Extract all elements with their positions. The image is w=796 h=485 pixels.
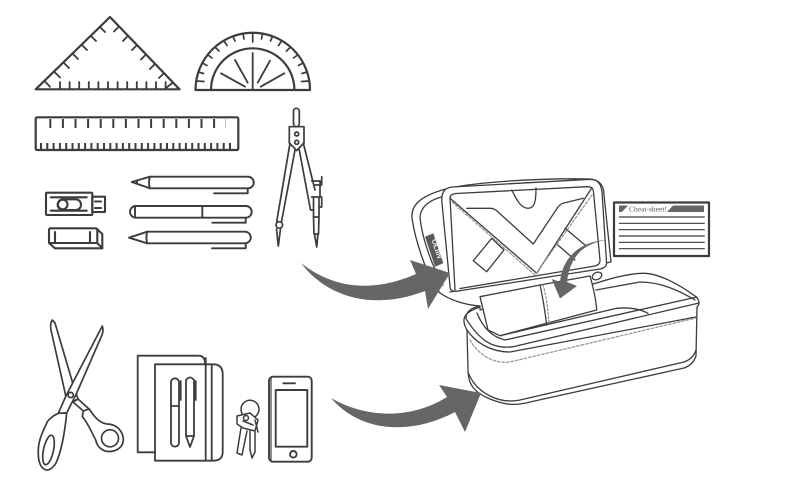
icon: brand label on lid — [425, 233, 444, 267]
cheat-sheet card: Cheat-sheet! — [629, 204, 667, 214]
pencil case: base with inserts — [464, 271, 699, 404]
icon: scissors — [38, 320, 123, 470]
icon: USB stick — [46, 193, 105, 215]
icon: pen 1 — [132, 177, 254, 193]
cheat-sheet card — [614, 202, 709, 256]
arrow: tools into lid pocket — [301, 260, 450, 309]
icon: smartphone — [269, 377, 312, 462]
icon: brand label on lid: OLIIN — [430, 238, 444, 260]
arrow: cheat-sheet into case — [552, 240, 607, 298]
icon: notebooks with pens — [138, 356, 223, 461]
icon: pen 3 — [129, 232, 251, 248]
icon: drawing compass — [276, 108, 322, 247]
icon: protractor — [196, 33, 310, 90]
icon: set square triangle — [36, 17, 180, 89]
icon: keys — [237, 400, 259, 458]
icon: pen 2 — [130, 206, 252, 223]
icon: ruler — [36, 117, 238, 150]
pencil case: open lid — [412, 179, 611, 306]
arrow: larger items into base — [331, 385, 481, 432]
icon: eraser — [49, 228, 102, 248]
